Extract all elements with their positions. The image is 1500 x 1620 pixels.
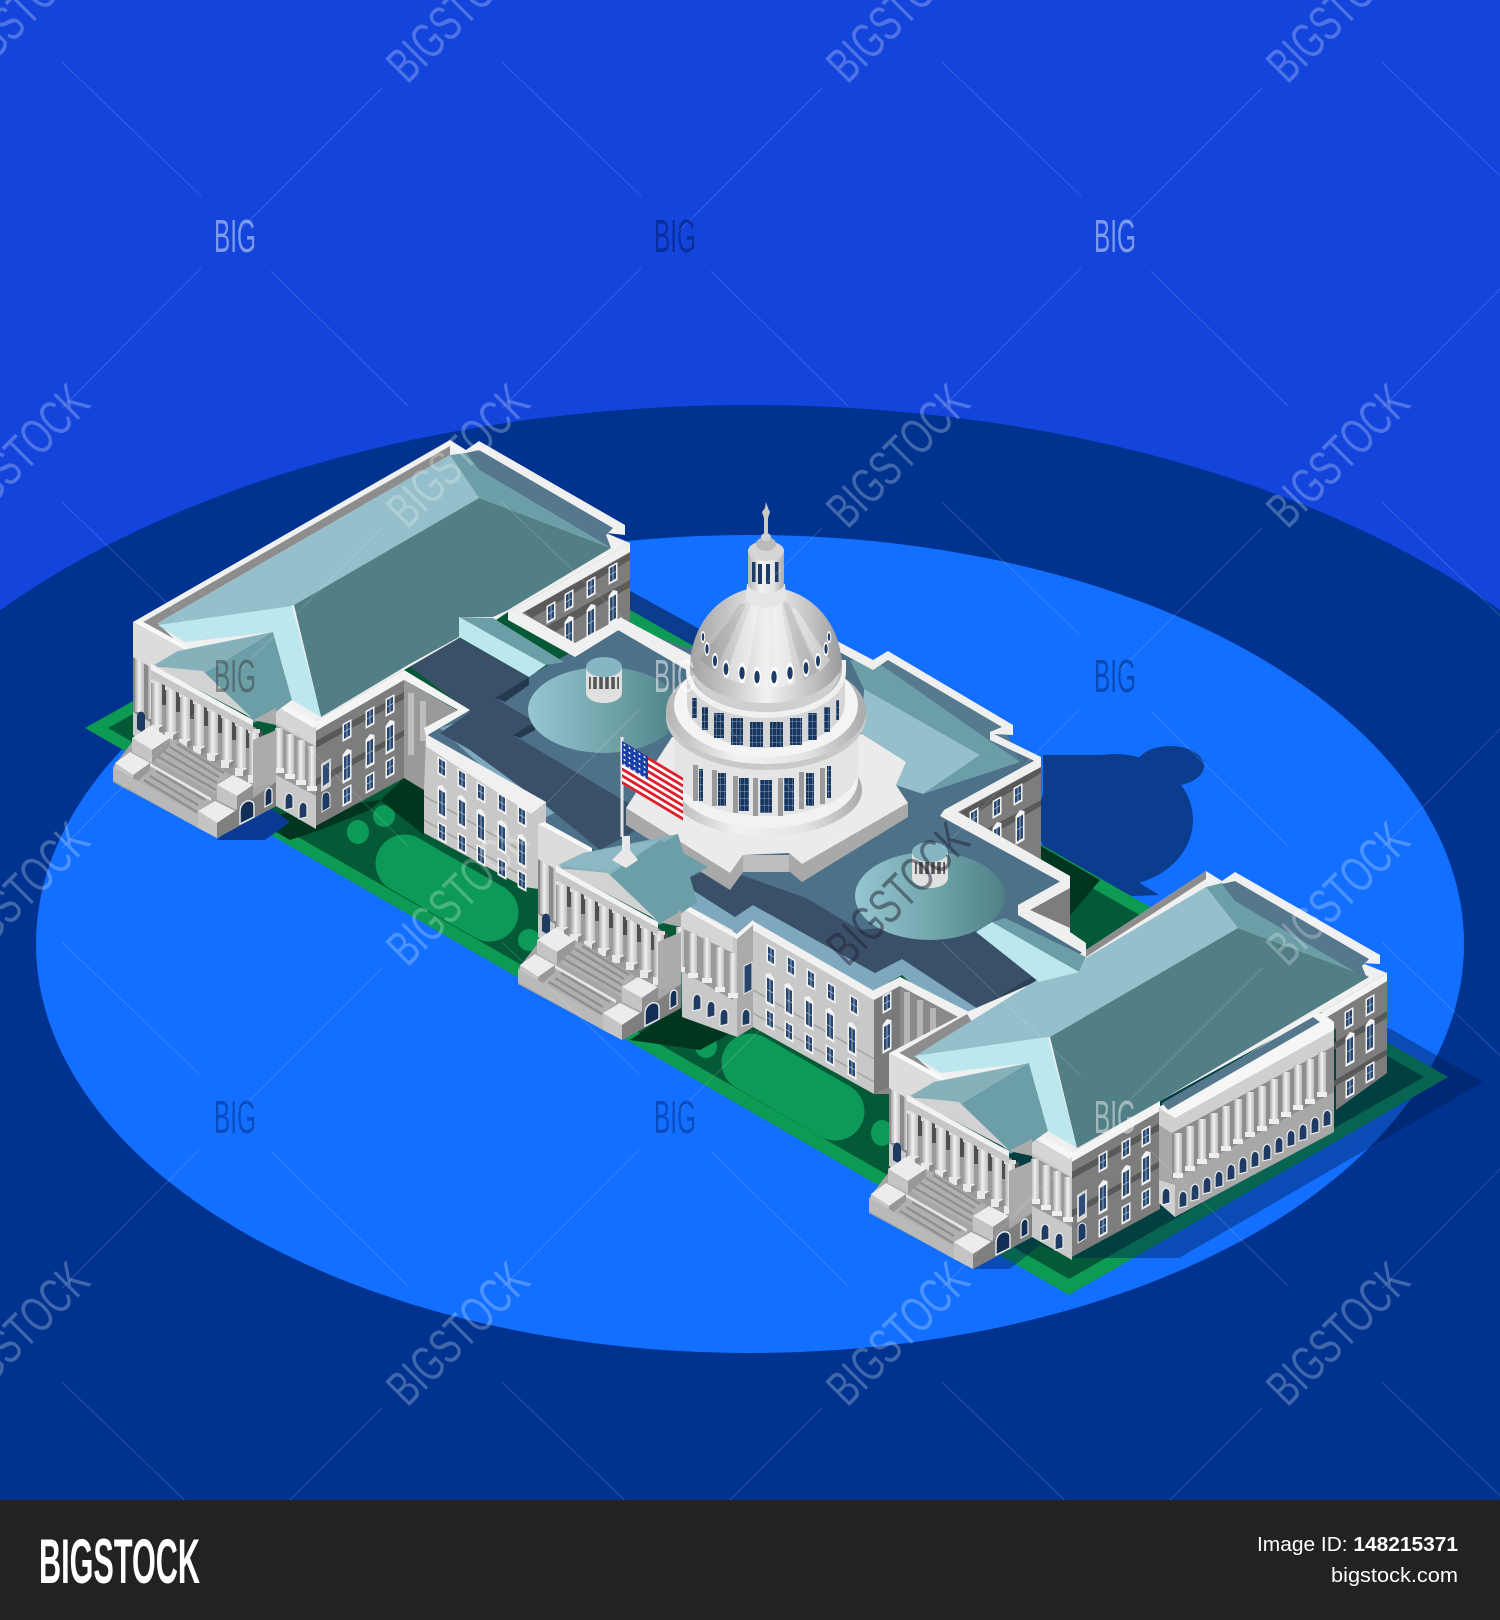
shadow behind center — [625, 588, 705, 648]
roof upper right triangle — [923, 755, 1020, 794]
left wing ground shadow — [217, 800, 290, 840]
center portico side face — [672, 897, 753, 1037]
watermark text: BIGSTOCK — [376, 374, 540, 538]
watermark text: BIGSTOCK — [816, 812, 980, 976]
left wing roof — [133, 440, 630, 722]
watermark BIG labels: BIG — [1094, 1091, 1136, 1143]
watermark BIG labels: BIG — [1094, 650, 1136, 702]
right wing front portico — [869, 1051, 1048, 1269]
center facade right — [753, 921, 874, 1094]
flag — [612, 737, 683, 868]
watermark BIG labels: BIG — [214, 210, 256, 262]
left roof skylight — [459, 617, 546, 677]
center front portico — [518, 822, 697, 1040]
roof upper right strip — [877, 656, 1020, 762]
capitol dome — [626, 502, 908, 890]
watermark text: BIGSTOCK — [376, 1252, 540, 1416]
watermark BIG labels: BIG — [654, 210, 696, 262]
lawn pills and trees — [347, 805, 893, 1151]
roof upper right light panel — [862, 689, 980, 794]
right wing dark wall — [1070, 1101, 1160, 1258]
right wing side face — [1023, 1128, 1075, 1260]
left wing front portico — [113, 620, 292, 838]
watermark text: BIGSTOCK — [376, 812, 540, 976]
left wing side face — [267, 697, 319, 829]
rotunda roof right — [855, 852, 1005, 940]
lantern — [746, 584, 786, 608]
back parapet left — [618, 617, 700, 672]
dome shell — [690, 587, 842, 712]
left wing right recess — [404, 670, 470, 790]
watermark text: BIGSTOCK — [816, 1252, 980, 1416]
statue — [762, 502, 770, 534]
footer bar — [0, 1500, 1500, 1620]
image id: Image ID: 148215371 — [1257, 1534, 1458, 1556]
dark slate corridor right — [680, 866, 1038, 1009]
left wing pediment skylight — [158, 606, 321, 717]
site url: bigstock.com — [1331, 1565, 1458, 1587]
right wing end wall — [1322, 973, 1387, 1110]
watermark text: BIGSTOCK — [1256, 1252, 1420, 1416]
center facade left — [424, 733, 546, 892]
right wing roof — [889, 871, 1387, 1153]
lawn — [85, 515, 1448, 1295]
back parapet right — [832, 641, 1041, 764]
flag pole base — [612, 836, 638, 868]
text: BIGSTOCK — [39, 1527, 200, 1597]
watermark BIG labels: BIG — [214, 1091, 256, 1143]
right notch wall — [944, 757, 1041, 885]
watermark text: BIGSTOCK — [816, 374, 980, 538]
rotunda roof left — [528, 667, 680, 753]
building ground shadow — [974, 1028, 1483, 1269]
watermark BIG labels: BIG — [214, 650, 256, 702]
cupola left — [586, 657, 622, 703]
left notch wall — [508, 543, 630, 651]
center portico roof — [558, 840, 708, 923]
left wing dark wall — [314, 670, 404, 827]
platform — [626, 803, 908, 890]
left notch parapet — [508, 543, 630, 657]
watermark text: BIGSTOCK — [1256, 374, 1420, 538]
watermark text: BIGSTOCK — [1256, 812, 1420, 976]
center roof — [408, 617, 1086, 1030]
right wing pediment skylight — [914, 1037, 1077, 1148]
watermark BIG labels: BIG — [1094, 210, 1136, 262]
dome shadow — [1037, 746, 1204, 900]
upper colonnade — [687, 660, 845, 748]
inner bright ellipse — [36, 535, 1464, 1353]
dome windows — [701, 631, 831, 687]
right wing east portico — [1159, 1013, 1334, 1217]
notch parapet — [940, 757, 1070, 887]
lower drum — [670, 744, 862, 836]
cupola right — [912, 842, 948, 888]
outer dark ellipse — [0, 405, 1500, 1500]
roof upper right band — [850, 660, 1020, 762]
recess right of center facade — [874, 977, 969, 1094]
watermark BIG labels: BIG — [654, 650, 696, 702]
rim — [666, 664, 866, 770]
front rim strips — [440, 713, 575, 820]
dark slate corridor left — [408, 638, 642, 850]
watermark BIG labels — [214, 210, 1136, 1143]
watermark BIG labels: BIG — [654, 1091, 696, 1143]
